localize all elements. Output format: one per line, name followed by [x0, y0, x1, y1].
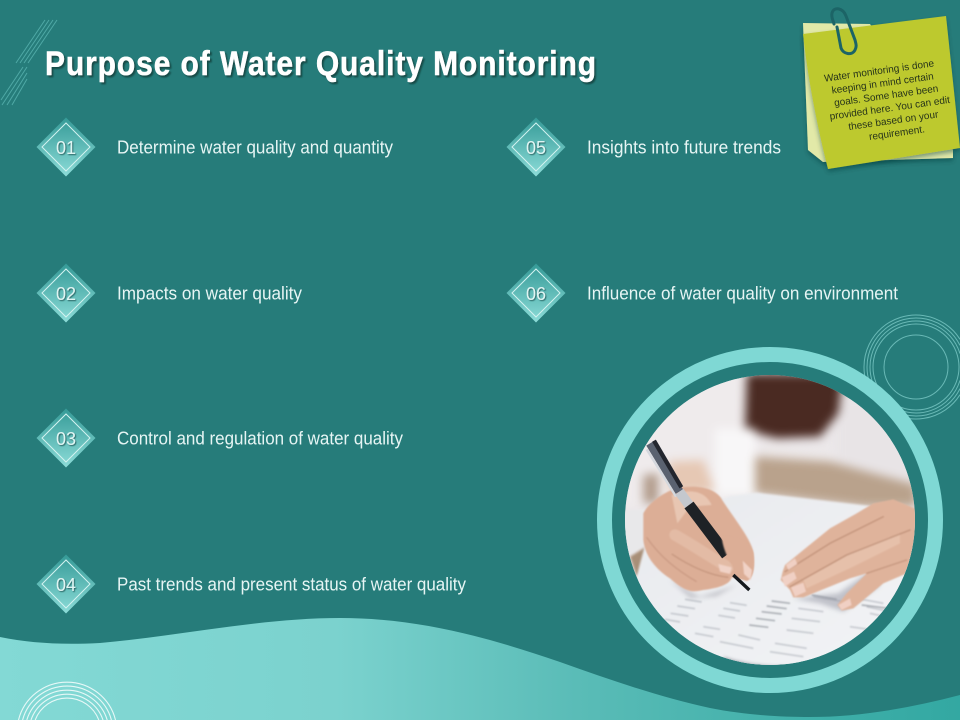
finger creases	[672, 554, 728, 577]
item 02	[36, 264, 302, 322]
note text: these based on your	[848, 109, 940, 133]
concentric rings: bottom left	[18, 682, 116, 720]
note text: requirement.	[868, 124, 926, 143]
index finger	[675, 535, 728, 567]
item 06: 06	[526, 284, 546, 304]
bottom wave	[0, 618, 960, 720]
item 03: Control and regulation of water quality	[117, 428, 403, 448]
outer ring	[604, 354, 936, 686]
paper	[633, 493, 918, 673]
note back sheet	[803, 23, 953, 162]
shadow below left hand	[674, 584, 732, 600]
blurred background	[623, 373, 917, 507]
item 02: Impacts on water quality	[117, 284, 302, 304]
thumb over pen	[722, 536, 754, 581]
laptop edge at left	[625, 510, 630, 557]
table shadow under the paper	[723, 656, 781, 665]
nails	[718, 564, 732, 574]
note text: Water monitoring is done	[824, 58, 935, 85]
shadow below right hand	[793, 573, 880, 612]
item 01	[36, 118, 393, 176]
item 04: 04	[56, 575, 76, 595]
item 01: Determine water quality and quantity	[117, 138, 393, 158]
hand silhouette	[781, 499, 918, 611]
note text: goals. Some have been	[833, 84, 939, 109]
concentric rings: right	[864, 315, 960, 419]
item 06: Influence of water quality on environment	[587, 284, 898, 304]
note text: provided here. You can edit	[829, 95, 951, 123]
pen	[647, 441, 749, 590]
item 02: 02	[56, 284, 76, 304]
decorative diagonal lines	[1, 20, 57, 105]
title: Purpose of Water Quality Monitoring	[45, 44, 597, 82]
photo circle	[604, 354, 936, 686]
sticky note	[803, 9, 960, 169]
item 05: 05	[526, 138, 546, 158]
note front sheet	[803, 16, 960, 169]
nails	[782, 572, 797, 587]
item 05: Insights into future trends	[587, 138, 781, 158]
item 03: 03	[56, 429, 76, 449]
item 04	[36, 554, 466, 614]
finger gaps	[785, 517, 883, 572]
thumb nail	[743, 561, 752, 580]
item 06	[506, 264, 898, 322]
note text: keeping in mind certain	[831, 71, 934, 97]
item 03	[36, 408, 403, 468]
item 04: Past trends and present status of water quality	[117, 574, 466, 594]
printed table lines	[665, 597, 890, 657]
right hand	[781, 499, 918, 611]
note text	[824, 57, 954, 148]
knuckle highlight	[803, 533, 900, 588]
item 05	[506, 118, 781, 176]
item 01: 01	[56, 138, 76, 158]
dense table column	[749, 595, 888, 627]
back of hand highlight	[672, 491, 712, 523]
left hand	[643, 487, 754, 591]
photo: hands writing on paper	[620, 370, 920, 673]
icon: paper clip	[832, 9, 856, 54]
